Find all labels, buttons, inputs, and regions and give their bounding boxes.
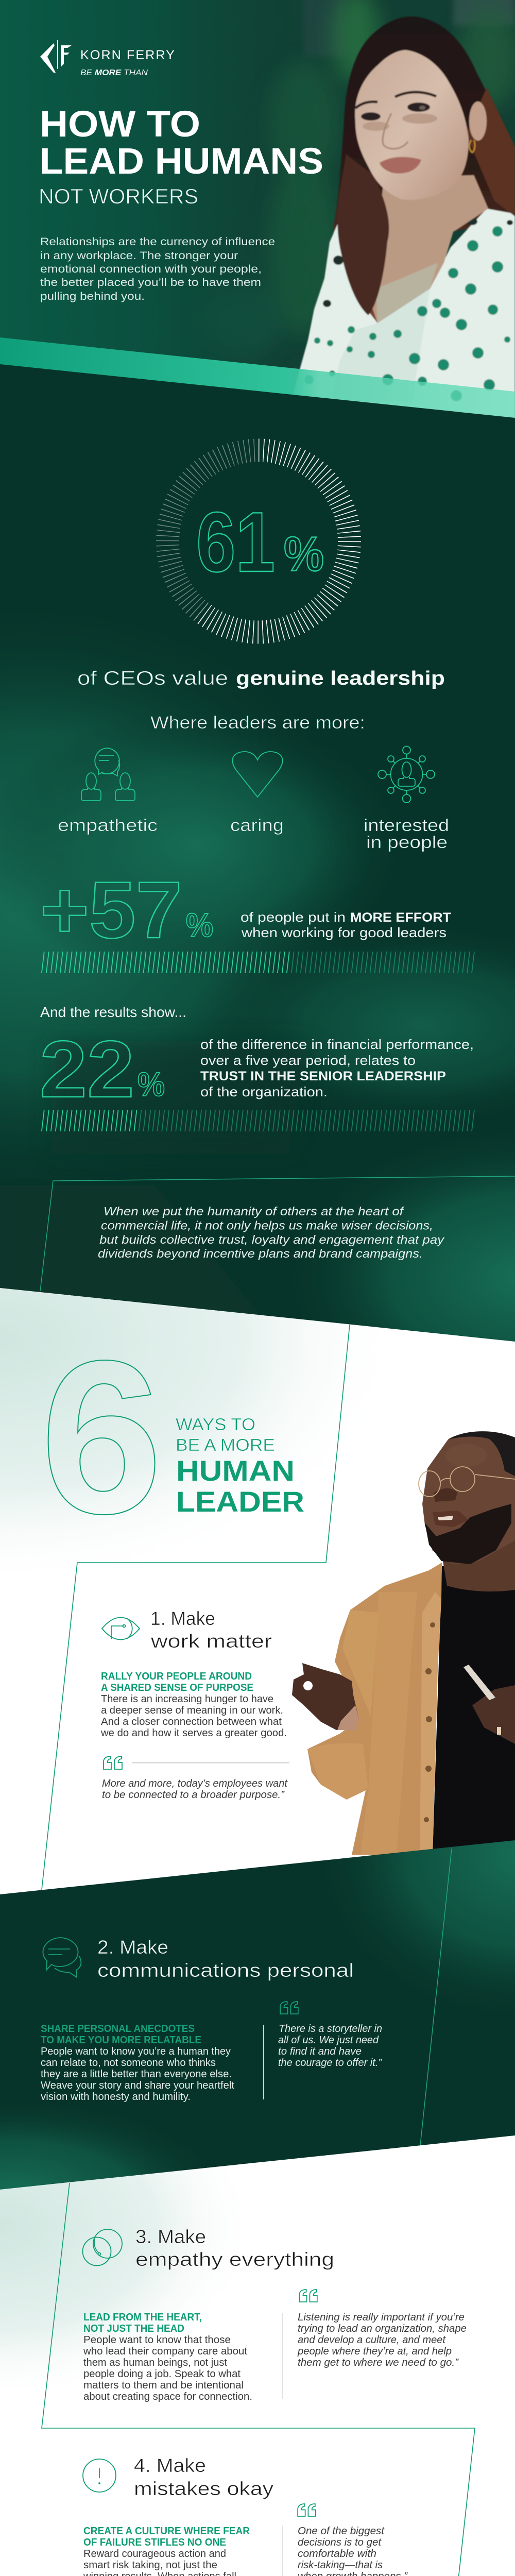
subheading: NOT JUST THE HEAD — [83, 2323, 184, 2334]
quote: humanity: but builds collective trust, loyalty and engagement that pay — [99, 1233, 445, 1246]
quote: One of the biggest — [298, 2526, 385, 2537]
divider — [263, 2025, 264, 2099]
face — [355, 50, 469, 200]
ring — [497, 1727, 501, 1735]
quote frame — [40, 1176, 515, 1291]
body text — [41, 2046, 234, 2103]
nose — [434, 1488, 457, 1502]
title: HOW TO — [40, 104, 200, 145]
description: of the organization. — [200, 1084, 328, 1099]
intro text: the better placed you’ll be to have them — [40, 276, 261, 289]
panel: stats — [0, 361, 515, 1350]
quote — [297, 2312, 467, 2368]
quote: humanity: commercial life, it not only helps us make wiser decisions, — [101, 1219, 433, 1232]
quote: to find it and have — [278, 2046, 362, 2057]
quote: and develop a culture, and meet — [298, 2334, 446, 2346]
icon: eye — [102, 1618, 140, 1639]
icon: interested in people — [378, 746, 435, 803]
body text: vision with honesty and humility. — [41, 2091, 191, 2103]
subheading: SHARE PERSONAL ANECDOTES — [41, 2023, 195, 2035]
marker — [464, 1665, 495, 1700]
subheading — [41, 2023, 201, 2046]
quote: decisions is to get — [298, 2537, 382, 2548]
section 3: make empathy everything — [82, 2226, 467, 2402]
title — [40, 104, 323, 182]
body text: Weave your story and share your heartfelt — [41, 2080, 234, 2091]
heading: 2. Make — [97, 1937, 168, 1958]
quote: There is a storyteller in — [279, 2023, 382, 2035]
eyes — [361, 112, 381, 121]
heading: ways to be a more human leader — [176, 1415, 304, 1518]
intro text: emotional connection with your people, — [40, 263, 262, 275]
blouse dots — [304, 226, 510, 401]
heading — [134, 2455, 274, 2499]
description: of the difference in financial performance, — [200, 1037, 474, 1052]
percent sign: % — [284, 527, 324, 582]
label: interested in people — [364, 816, 449, 852]
heading: communications personal — [97, 1960, 354, 1981]
description — [241, 909, 451, 940]
body text — [83, 2334, 252, 2402]
quote: the courage to offer it.” — [278, 2057, 382, 2069]
subheading: TO MAKE YOU MORE RELATABLE — [41, 2035, 201, 2046]
body text: about creating space for connection. — [83, 2391, 252, 2402]
quote mark — [104, 1756, 122, 1769]
photo: man — [292, 1431, 515, 1855]
quote mark — [298, 2504, 316, 2516]
quote mark — [280, 2002, 298, 2014]
stats background — [0, 361, 515, 1350]
description: when working for good leaders — [241, 925, 447, 940]
body text: matters to them and be intentional — [83, 2380, 244, 2391]
section 4: make mistakes okay — [83, 2455, 408, 2576]
nose — [383, 113, 408, 149]
body text: who lead their company care about — [83, 2346, 247, 2357]
heading: where leaders are more: Where leaders are more: — [150, 713, 365, 733]
neck and chest — [366, 175, 488, 323]
description — [200, 1037, 474, 1099]
section 2: make communications personal — [41, 1937, 382, 2103]
hair — [448, 1431, 515, 1476]
logo: Korn Ferry — [40, 40, 176, 77]
wordmark: KORN FERRY — [80, 48, 176, 62]
divider — [282, 2526, 283, 2576]
number: +57 — [40, 866, 182, 955]
panel: sections 3 and 4 background — [0, 2133, 515, 2576]
body text — [100, 1693, 287, 1739]
body text: people doing a job. Speak to what — [83, 2368, 241, 2380]
subheading: RALLY YOUR PEOPLE AROUND — [101, 1671, 252, 1682]
quote: people where they’re at, and help — [297, 2346, 452, 2357]
quote: trying to lead an organization, shape — [298, 2323, 467, 2334]
intro text — [40, 235, 275, 302]
heading: genuine leadership — [77, 668, 445, 689]
heading — [150, 1608, 272, 1652]
body text: smart risk taking, not just the — [83, 2560, 217, 2571]
quote: all of us. We just need — [278, 2035, 379, 2046]
hero photo: plant background — [0, 0, 515, 428]
quote: More and more, today’s employees want — [102, 1778, 288, 1789]
head — [422, 1433, 515, 1564]
quote — [298, 2526, 408, 2576]
gauge remaining ticks — [168, 450, 349, 632]
earring — [469, 140, 475, 152]
quote — [278, 2023, 382, 2069]
hair over blouse, left lock — [337, 155, 389, 315]
heading: genuine leadership: of CEOs value — [77, 668, 228, 689]
ear — [469, 101, 487, 141]
subheading: CREATE A CULTURE WHERE FEAR — [83, 2526, 250, 2537]
body text: a deeper sense of meaning in our work. — [101, 1705, 283, 1716]
percent sign: % — [138, 1065, 165, 1103]
intro text: Relationships are the currency of influence — [40, 235, 275, 248]
panel: section 2 background — [0, 1834, 515, 2195]
right hand — [472, 1685, 515, 1744]
heading: 3. Make — [135, 2226, 206, 2247]
body text: can relate to, not someone who thinks — [41, 2057, 216, 2069]
intro text: in any workplace. The stronger your — [40, 249, 238, 262]
heading — [97, 1937, 354, 1981]
quote: comfortable with — [298, 2548, 376, 2560]
body text: we do and how it serves a greater good. — [100, 1727, 287, 1739]
icon: chat — [43, 1938, 81, 1977]
subheading — [83, 2526, 250, 2548]
quote: risk-taking—that is — [298, 2560, 383, 2571]
body text: they are a little better than everyone else. — [41, 2069, 232, 2080]
subtitle: NOT WORKERS — [39, 184, 198, 208]
description: of people put in — [241, 909, 346, 925]
heading — [135, 2226, 334, 2270]
heading: empathy everything — [135, 2249, 334, 2270]
body text — [83, 2548, 252, 2576]
mint gradient background — [0, 1283, 515, 1850]
divider — [282, 2313, 283, 2399]
teal diagonal band — [0, 337, 515, 428]
quote mark — [299, 2290, 317, 2302]
eyebrows — [355, 92, 436, 108]
heading: ways to be a more human leader: WAYS TO — [176, 1415, 255, 1434]
beard — [425, 1504, 511, 1564]
frame line — [42, 1325, 350, 1890]
glasses — [419, 1467, 515, 1497]
chart: 61 percent radial gauge — [168, 450, 349, 632]
heading: 1. Make — [150, 1608, 215, 1629]
logo mark — [40, 40, 72, 73]
label: empathetic: empathetic — [58, 816, 158, 835]
description: over a five year period, relates to — [200, 1053, 416, 1068]
buttons — [424, 1622, 435, 1822]
quote rule — [132, 1762, 289, 1763]
left hand — [292, 1663, 359, 1730]
stat: 22 percent — [40, 1025, 474, 1114]
black shirt — [433, 1551, 515, 1855]
mouth — [433, 1511, 469, 1527]
subheading: OF FAILURE STIFLES NO ONE — [83, 2537, 226, 2548]
label: interested in people: in people — [366, 833, 448, 852]
number: 22 — [40, 1025, 134, 1114]
title: LEAD HUMANS — [40, 141, 323, 182]
quote: humanity: dividends beyond incentive plans and brand campaigns. — [98, 1247, 423, 1260]
quote: Listening is really important if you’re — [298, 2312, 465, 2323]
body text: There is an increasing hunger to have — [101, 1693, 273, 1705]
subheading: LEAD FROM THE HEART, — [83, 2312, 202, 2323]
heading: mistakes okay — [134, 2478, 274, 2499]
description: TRUST IN THE SENIOR LEADERSHIP — [200, 1069, 446, 1083]
subheading — [83, 2312, 202, 2334]
icon: empathetic — [81, 748, 135, 801]
bar: 57 percent ticks — [43, 952, 474, 973]
bar: 22 percent ticks — [43, 1110, 474, 1131]
body text: People want to know that those — [83, 2334, 231, 2346]
heading: work matter — [150, 1631, 272, 1652]
section 1: make work matter — [100, 1608, 289, 1801]
panel: hero — [0, 0, 515, 428]
stat: plus 57 percent — [40, 866, 451, 955]
icon: caring heart — [232, 752, 283, 797]
blouse — [294, 209, 515, 428]
body text: them as human beings, not just — [83, 2357, 227, 2368]
quote: them get to where we need to go.” — [298, 2357, 459, 2368]
gauge filled ticks — [168, 450, 349, 632]
icon labels — [58, 816, 449, 852]
label: caring: caring — [230, 816, 284, 835]
lips — [380, 157, 421, 174]
neck — [443, 1535, 515, 1591]
heading: ways to be a more human leader: HUMAN — [176, 1454, 295, 1487]
text: and the results show: And the results show... — [40, 1004, 186, 1020]
panel: six ways — [0, 1283, 515, 1890]
body text: And a closer connection between what — [101, 1716, 282, 1727]
heading: ways to be a more human leader: BE A MORE — [176, 1435, 275, 1454]
quote — [102, 1778, 288, 1801]
icon: exclamation — [83, 2459, 116, 2492]
percent sign: % — [186, 906, 213, 944]
heading: genuine leadership: genuine leadership — [236, 668, 445, 689]
heading: ways to be a more human leader: LEADER — [176, 1485, 304, 1518]
subheading — [101, 1671, 253, 1693]
heading: 4. Make — [134, 2455, 206, 2476]
big outlined number 6: 6 — [40, 1315, 163, 1559]
body text: People want to know you’re a human they — [41, 2046, 231, 2057]
label: interested in people: interested — [364, 816, 449, 835]
icon: circles — [82, 2229, 122, 2266]
quote: to be connected to a broader purpose.” — [102, 1789, 285, 1801]
description: MORE EFFORT — [350, 910, 451, 925]
quote: humanity: When we put the humanity of others at the heart of — [104, 1205, 405, 1218]
tagline: BE MORE THAN — [80, 69, 148, 77]
61 number: 61 — [196, 495, 275, 589]
coat — [307, 1563, 442, 1855]
body text: Reward courageous action and — [83, 2548, 226, 2560]
subheading: A SHARED SENSE OF PURPOSE — [101, 1682, 253, 1693]
intro text: pulling behind you. — [40, 290, 145, 302]
photo: woman — [294, 16, 515, 428]
quote: humanity — [98, 1205, 445, 1260]
